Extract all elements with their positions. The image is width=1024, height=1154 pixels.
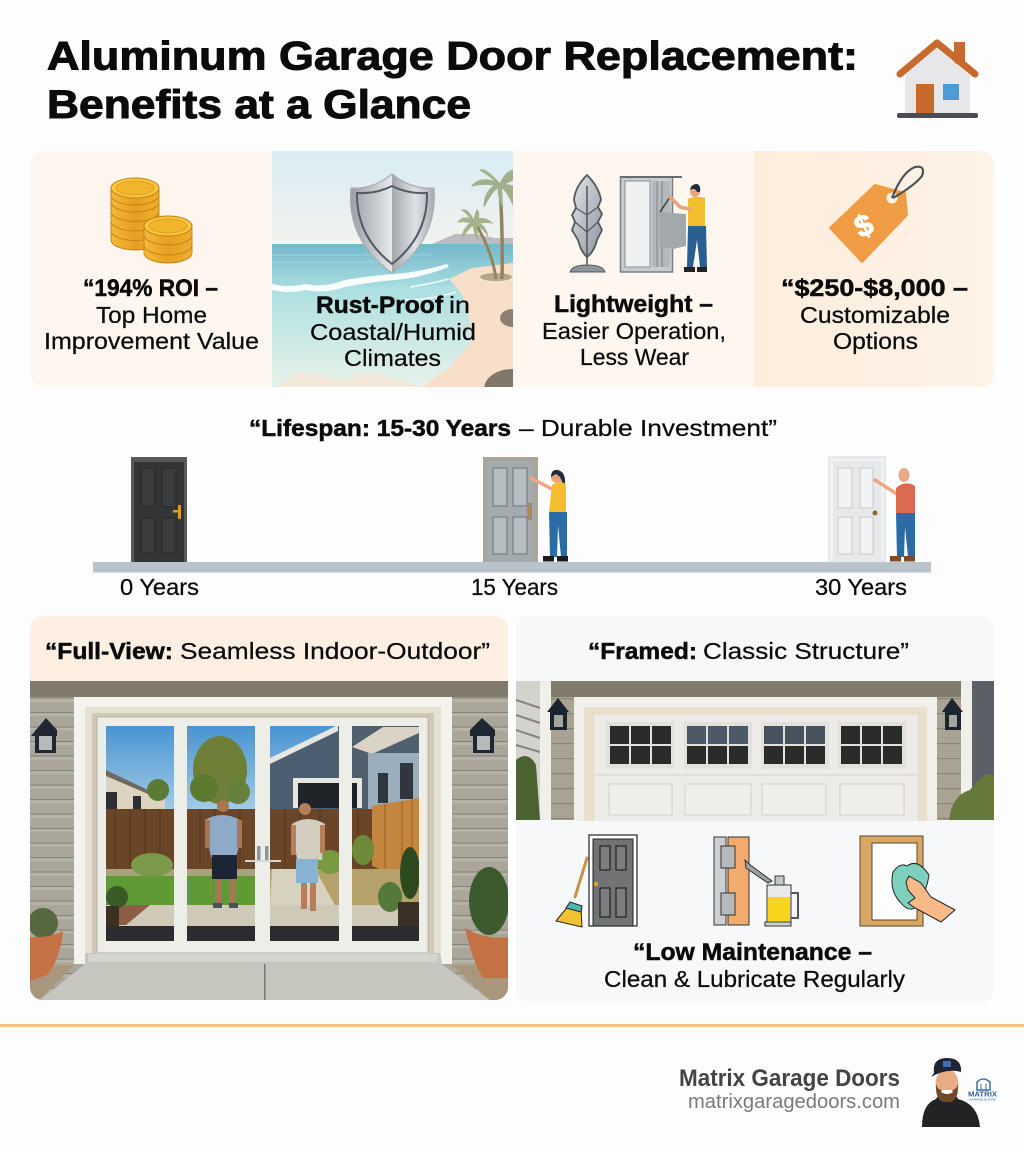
icon: house: [897, 42, 978, 118]
door: weathered, 15 years, with woman: [483, 457, 568, 562]
door panels: [609, 784, 904, 815]
card: rust-proof beach background: [272, 151, 513, 387]
icon: price tag: [830, 167, 923, 262]
icon: door and broom: [556, 835, 637, 927]
door: white, 30 years, with man: [829, 457, 915, 562]
text: price: [781, 275, 968, 354]
door mullions: [174, 717, 352, 953]
timeline labels: 0 Years: [120, 574, 199, 600]
timeline labels: 15 Years: [471, 574, 558, 600]
text: lightweight: Less Wear: [580, 344, 689, 370]
text: price: Options: [833, 328, 918, 354]
heading: framed: [588, 638, 909, 664]
text: price: Customizable: [800, 302, 950, 328]
timeline labels: 30 Years: [815, 574, 907, 600]
panel: framed door and maintenance: [516, 681, 994, 821]
palm trees: [458, 170, 513, 279]
avatar and logo: MATRIX: [968, 1092, 997, 1098]
title: [47, 34, 858, 127]
text: lightweight: Lightweight –: [554, 291, 713, 318]
man left in reflection: [217, 800, 229, 812]
reflection scene: [106, 725, 420, 941]
heading: full-view: Seamless Indoor-Outdoor”: [180, 638, 490, 664]
title: Aluminum Garage Door Replacement:: [47, 34, 858, 78]
avatar and logo: GARAGE DOORS: [969, 1098, 996, 1102]
text: ROI: [44, 275, 259, 354]
heading: lifespan: [249, 415, 777, 441]
text: rust-proof: Climates: [344, 345, 441, 371]
door windows: [606, 722, 906, 769]
avatar and logo: [922, 1058, 997, 1127]
text: rust-proof: Coastal/Humid: [310, 319, 476, 345]
icon: frame and cleaning hand: [860, 836, 955, 926]
heading: full-view: “Full-View:: [45, 638, 173, 664]
text: rust-proof: [310, 292, 476, 371]
heading: lifespan: “Lifespan: 15-30 Years: [249, 415, 511, 441]
text: ROI: Improvement Value: [44, 328, 259, 354]
potted plants: [28, 867, 509, 981]
text: low maintenance: [604, 939, 906, 992]
footer brand text: [679, 1065, 900, 1113]
heading: framed: “Framed:: [588, 638, 697, 664]
photo: garage with full-view door: [28, 681, 509, 1001]
footer divider: [0, 1024, 1024, 1027]
icon: steel shield: [351, 174, 434, 273]
text: lightweight: [542, 291, 726, 370]
heading: framed: Classic Structure”: [703, 638, 909, 664]
man right in reflection: [299, 803, 311, 815]
text: rust-proof: in: [449, 292, 470, 318]
heading: lifespan: – Durable Investment”: [519, 415, 777, 441]
icon: hinge lubrication: [714, 837, 798, 926]
text: low maintenance: “Low Maintenance –: [633, 939, 872, 966]
text: lightweight: Easier Operation,: [542, 318, 726, 344]
panel: full-view door: [28, 616, 509, 1001]
text: ROI: Top Home: [96, 302, 207, 328]
text: low maintenance: Clean & Lubricate Regularly: [604, 966, 906, 992]
card: price background: [754, 151, 994, 387]
card: ROI background: [30, 151, 272, 387]
photo: framed garage door: [516, 681, 994, 821]
timeline: [93, 457, 931, 600]
panel background: [516, 616, 994, 1002]
wall lanterns: [547, 698, 963, 730]
timeline labels: [120, 574, 907, 600]
driveway and gravel: [30, 965, 74, 1001]
panel: benefits strip: [30, 151, 994, 409]
text: price: “$250-$8,000 –: [781, 275, 968, 302]
icon: feather: [570, 175, 605, 272]
door handles: [245, 846, 281, 862]
icon: price tag: $: [849, 208, 879, 245]
footer brand text: matrixgaragedoors.com: [688, 1091, 900, 1113]
text: rust-proof: Rust-Proof: [316, 292, 444, 319]
icon: coin stacks: [111, 178, 192, 263]
icon: lightweight door and person: [620, 176, 707, 272]
door: new, 0 years: [131, 457, 187, 562]
wall lanterns: [31, 718, 495, 753]
timeline bar: [93, 562, 931, 572]
header band: [30, 616, 508, 682]
heading: full-view: [45, 638, 490, 664]
text: ROI: “194% ROI –: [83, 275, 218, 302]
footer brand text: Matrix Garage Doors: [679, 1065, 900, 1092]
title: Benefits at a Glance: [47, 83, 471, 127]
card: lightweight background: [513, 151, 754, 387]
